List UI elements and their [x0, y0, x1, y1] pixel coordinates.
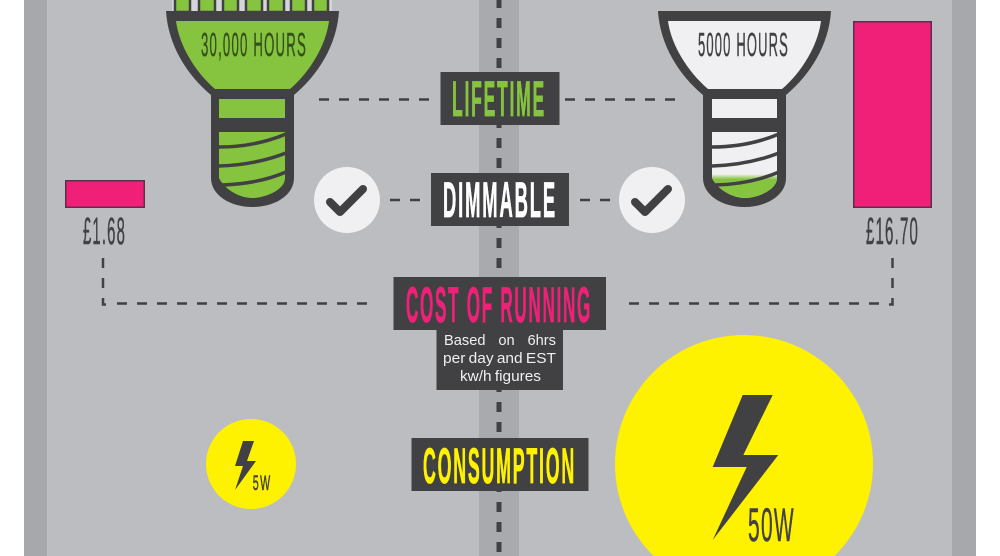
- icon: left check mark: [314, 167, 380, 233]
- bulb body outline: [166, 11, 339, 207]
- infographic: bulb comparison: COST OF RUNNING: [406, 277, 592, 333]
- centre dashed line: [496, 0, 502, 556]
- right halogen bulb: 5000 HOURS: [698, 26, 789, 63]
- cost connector dashes: [103, 258, 892, 304]
- bar: LED running cost: £1.68: [83, 211, 126, 253]
- icon: 50W energy circle: [615, 335, 873, 556]
- screw thread: [219, 132, 286, 198]
- infographic: bulb comparison: CONSUMPTION: [423, 438, 576, 494]
- infographic: bulb comparison: LIFETIME: [452, 71, 546, 127]
- text block: cost basis note: per day and EST: [443, 350, 556, 367]
- right halogen bulb: [658, 11, 831, 207]
- icon: LED strips: [172, 0, 332, 12]
- screw thread with small green fill: [712, 132, 779, 198]
- lifetime connector dashes: [319, 98, 676, 101]
- icon: 5W energy circle: [206, 419, 296, 509]
- bar: LED running cost: [66, 181, 144, 253]
- left LED bulb: 30,000 HOURS: [201, 26, 307, 63]
- icon: right check mark: [619, 167, 685, 233]
- neck segment: [712, 99, 777, 118]
- icon: 50W energy circle: 50W: [748, 498, 795, 551]
- neck segment: [219, 99, 285, 118]
- heading: lifetime: [440, 71, 560, 127]
- infographic: bulb comparison: £16.70: [866, 211, 919, 253]
- text block: cost basis note: kw/h figures: [460, 368, 541, 385]
- text block: cost basis note: [436, 330, 563, 390]
- reflector fill: [176, 21, 329, 89]
- icon: 5W energy circle: 5W: [253, 472, 272, 495]
- bulb body outline: [658, 11, 831, 207]
- dimmable connector dashes: [390, 199, 611, 201]
- bar: halogen running cost: [854, 22, 931, 253]
- heading: consumption: [412, 438, 588, 494]
- left LED bulb: [166, 0, 339, 207]
- text block: cost basis note: Based on 6hrs: [444, 332, 556, 349]
- heading: dimmable: [431, 172, 569, 228]
- heading: cost of running: [394, 277, 606, 333]
- infographic: bulb comparison: DIMMABLE: [443, 172, 557, 228]
- reflector fill: [668, 21, 821, 89]
